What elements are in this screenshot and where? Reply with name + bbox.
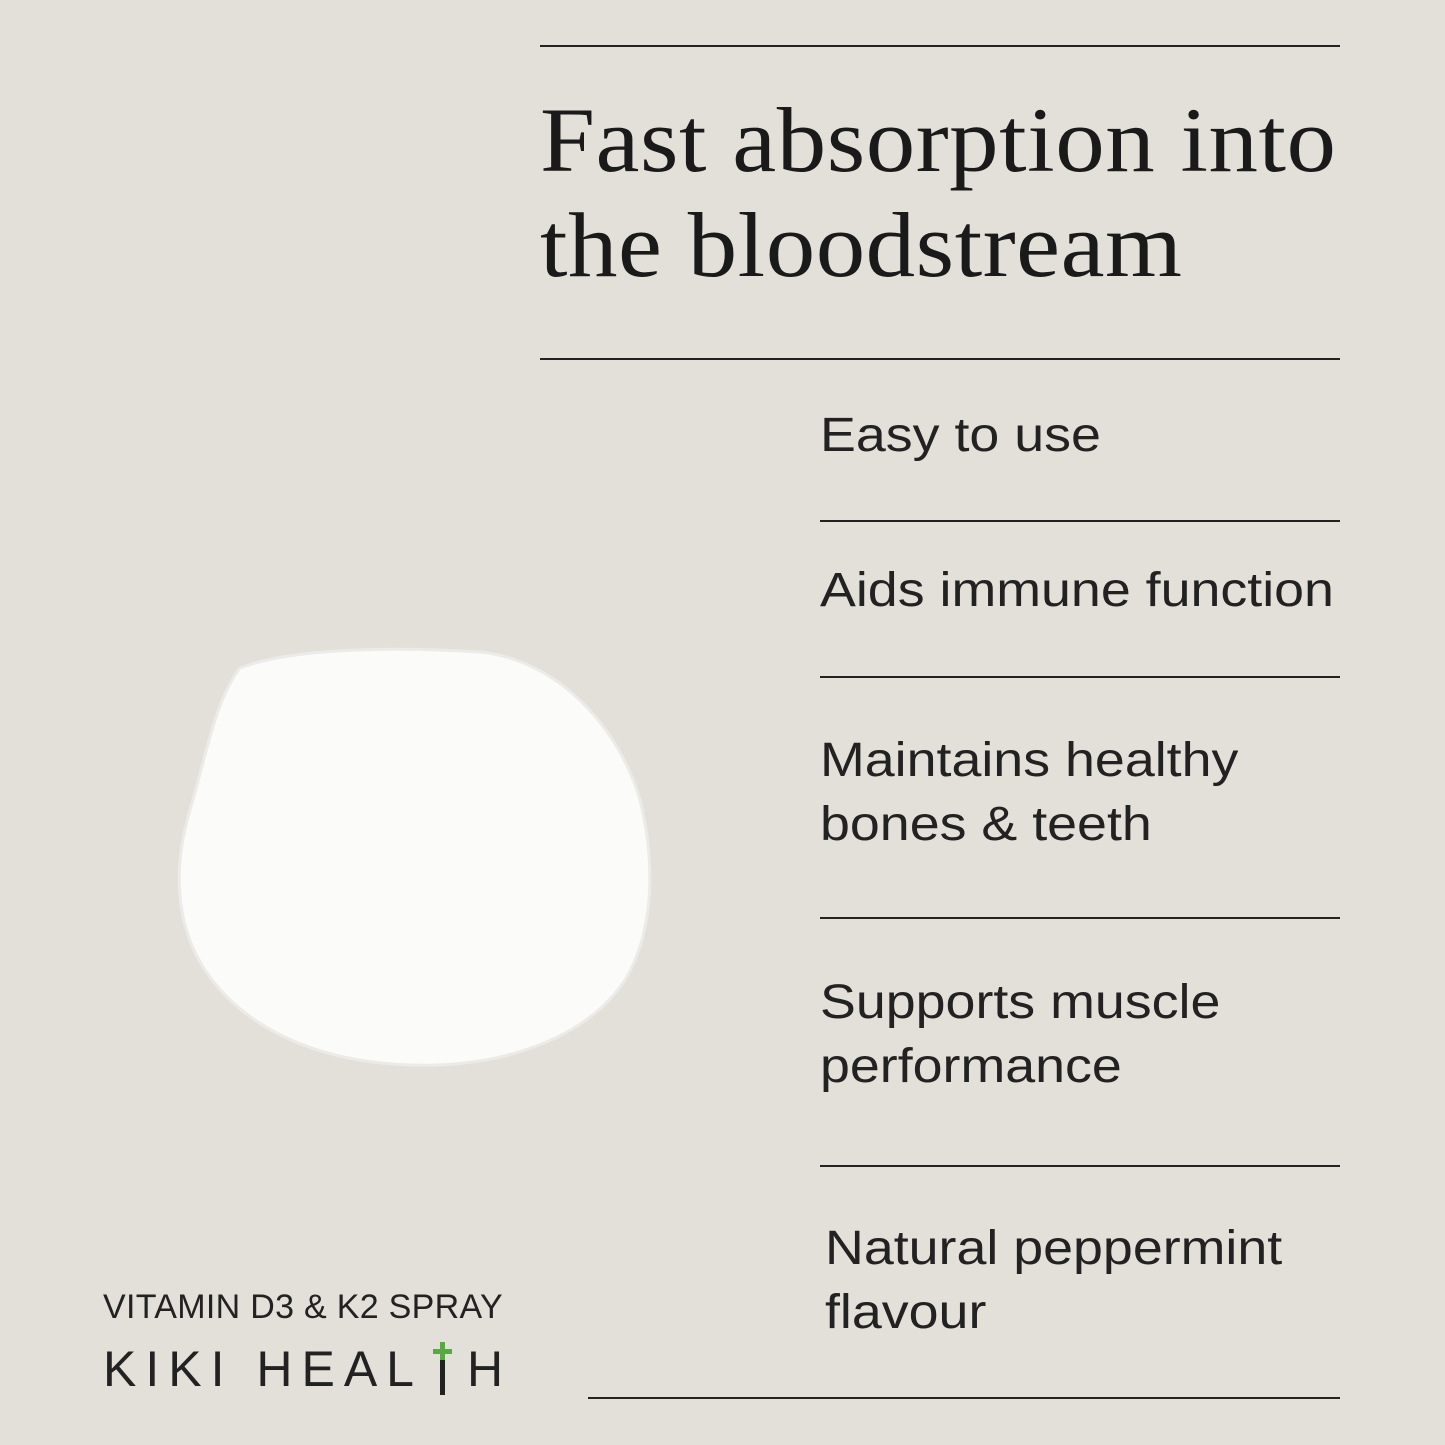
title: Fast absorption into <box>540 89 1336 191</box>
product name: VITAMIN D3 & K2 SPRAY <box>103 1288 503 1326</box>
feature: peppermint: Natural peppermint <box>825 1222 1282 1275</box>
feature: bones: bones & teeth <box>820 798 1152 851</box>
title <box>540 89 1336 296</box>
feature: muscle: Supports muscle <box>820 976 1220 1029</box>
feature: peppermint <box>825 1222 1282 1339</box>
feature: easy to use: Easy to use <box>820 409 1101 462</box>
feature: muscle: performance <box>820 1040 1122 1093</box>
feature: immune: Aids immune function <box>820 564 1334 617</box>
feature: peppermint: flavour <box>825 1286 986 1339</box>
feature: muscle <box>820 976 1220 1093</box>
feature: bones: Maintains healthy <box>820 734 1238 787</box>
logo: KIKI HEALTH: KIKI HEAL <box>103 1341 423 1397</box>
title: the bloodstream <box>540 194 1183 296</box>
icon: green plus T <box>433 1342 452 1395</box>
image: white cream blob <box>178 648 652 1066</box>
feature: bones <box>820 734 1238 851</box>
logo: KIKI HEALTH: H <box>467 1341 503 1397</box>
